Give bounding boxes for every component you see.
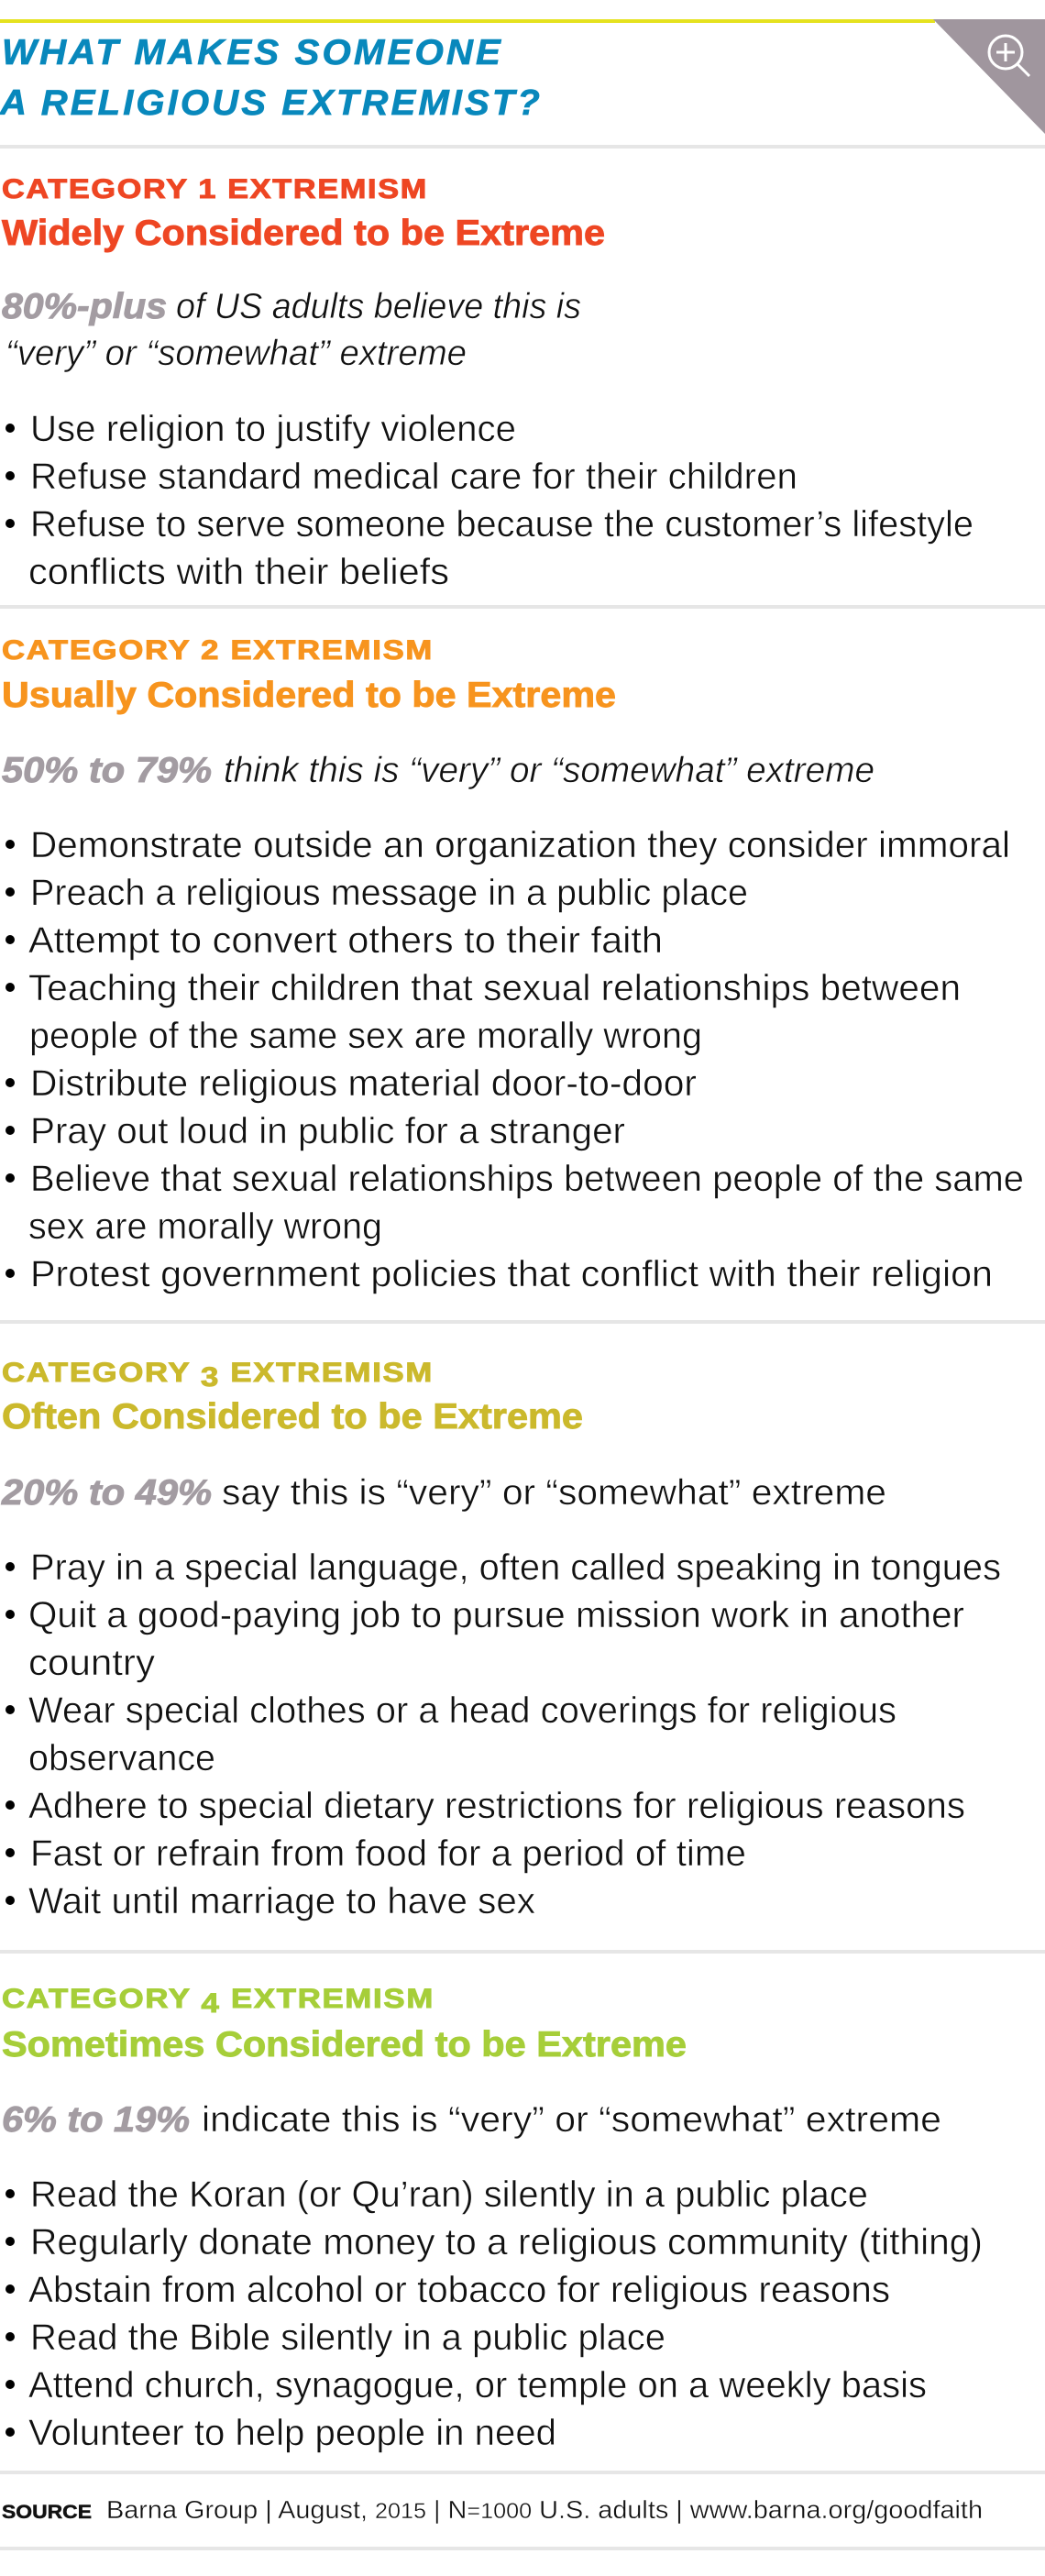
panel: category 4 (2, 1984, 983, 2453)
bullet list: Pray in a special language, often called speaking in tongues (30, 1547, 1001, 1588)
bullet list: Abstain from alcohol or tobacco for religious reasons (28, 2270, 890, 2310)
bullet list: Quit a good-paying job to pursue mission work in another (28, 1595, 964, 1635)
category heading: Sometimes Considered to be Extreme (2, 2025, 687, 2064)
category label: CATEGORY 1 EXTREMISM (2, 174, 428, 204)
intro text: 20% to 49% (1, 1473, 212, 1513)
bullet list: conflicts with their beliefs (28, 552, 449, 592)
intro text: indicate this is “very” or “somewhat” extreme (202, 2100, 941, 2140)
bullet list: Read the Bible silently in a public place (30, 2317, 666, 2358)
bullet list: Teaching their children that sexual relationships between (28, 968, 961, 1008)
panel: category 1 (2, 174, 974, 592)
bullet list: Refuse to serve someone because the customer’s lifestyle (30, 504, 974, 545)
bullet list: Protest government policies that conflict with their religion (30, 1254, 993, 1294)
intro text: 6% to 19% (2, 2100, 190, 2140)
bullet list: Fast or refrain from food for a period of time (30, 1833, 746, 1874)
category label: 3 (201, 1362, 220, 1393)
bullet list (6, 2174, 983, 2453)
intro text: say this is “very” or “somewhat” extreme (222, 1473, 886, 1513)
bullet list: Use religion to justify violence (30, 409, 516, 449)
intro text: think this is “very” or “somewhat” extreme (224, 751, 874, 790)
bullet list: Read the Koran (or Qu’ran) silently in a public place (30, 2174, 868, 2215)
category label: EXTREMISM (220, 1358, 434, 1388)
intro text: 50% to 79% (2, 751, 212, 790)
bullet list: observance (28, 1738, 215, 1778)
category label: CATEGORY (2, 1358, 165, 1388)
category label: CATEGORY 2 EXTREMISM (2, 635, 434, 666)
bullet list: Wear special clothes or a head coverings for religious (28, 1690, 896, 1731)
category label: 4 (202, 1988, 221, 2019)
bullet list: Wait until marriage to have sex (28, 1881, 535, 1921)
title: A RELIGIOUS EXTREMIST? (0, 83, 543, 123)
title: WHAT MAKES SOMEONE (2, 33, 503, 72)
intro text: of US adults believe this is (176, 287, 581, 326)
bullet list: Regularly donate money to a religious community (tithing) (30, 2222, 983, 2262)
bullet list: sex are morally wrong (28, 1206, 382, 1247)
source footer: Barna Group | August, 2015 | N=1000 U.S. adults | www.barna.org/goodfaith (106, 2495, 983, 2524)
bullet list (6, 409, 974, 592)
bullet list: Preach a religious message in a public place (30, 873, 748, 913)
bullet list: Believe that sexual relationships between people of the same (30, 1159, 1024, 1199)
bullet list (6, 825, 1024, 1294)
intro text: “very” or “somewhat” extreme (6, 334, 467, 373)
bullet list: Attempt to convert others to their faith (28, 920, 663, 961)
bullet list: Attend church, synagogue, or temple on a weekly basis (28, 2365, 927, 2405)
title (0, 33, 543, 123)
intro text (2, 287, 581, 373)
bullet list (6, 1547, 1001, 1921)
icon: zoom corner (933, 19, 1045, 134)
bullet list: Adhere to special dietary restrictions for religious reasons (28, 1786, 965, 1826)
category heading: Widely Considered to be Extreme (2, 214, 605, 253)
bullet list: Volunteer to help people in need (28, 2413, 556, 2453)
bullet list: Refuse standard medical care for their children (30, 457, 798, 497)
panel: category 2 (2, 635, 1024, 1294)
panel: category 3 (1, 1358, 1001, 1921)
intro text: 80%-plus (2, 287, 167, 326)
bullet list: country (28, 1643, 155, 1683)
category heading: Usually Considered to be Extreme (2, 676, 616, 715)
header (0, 19, 1045, 134)
category heading: Often Considered to be Extreme (2, 1397, 583, 1437)
source footer: SOURCE (2, 2502, 92, 2523)
bullet list: Pray out loud in public for a stranger (30, 1111, 625, 1151)
category label: CATEGORY (2, 1984, 165, 2014)
category label: EXTREMISM (221, 1984, 434, 2014)
bullet list: Demonstrate outside an organization they consider immoral (30, 825, 1010, 865)
bullet list: people of the same sex are morally wrong (29, 1016, 702, 1056)
bullet list: Distribute religious material door-to-door (30, 1063, 697, 1104)
